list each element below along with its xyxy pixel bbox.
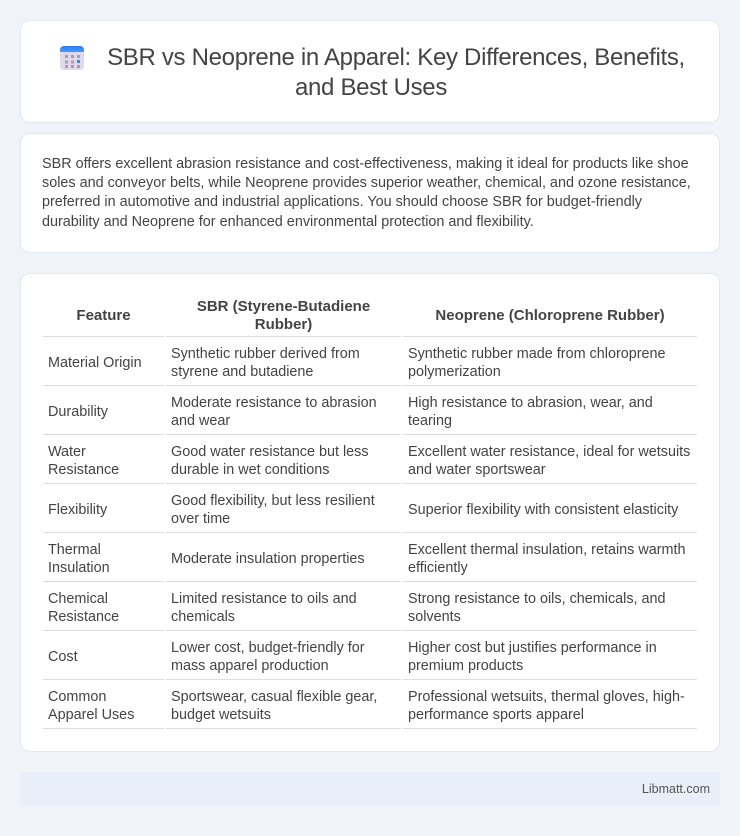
row: thermal insulation (48, 542, 686, 576)
row: chemical resistance: chemicals (171, 609, 235, 625)
row: durability: Durability (48, 404, 108, 420)
intro card (20, 133, 720, 253)
row: water resistance: and water sportswear (408, 462, 546, 478)
row: material origin: Synthetic rubber made from chloroprene (408, 346, 666, 362)
table header: SBR (Styrene-Butadiene (197, 298, 370, 315)
row: thermal insulation: Excellent thermal insulation, retains warmth (408, 542, 686, 558)
row: flexibility: Good flexibility, but less resilient (171, 493, 375, 509)
row: water resistance: Good water resistance but less (171, 444, 369, 460)
row: cost: Lower cost, budget-friendly for (171, 640, 365, 656)
row: cost: Cost (48, 649, 78, 665)
row: chemical resistance: solvents (408, 609, 461, 625)
footer bar (20, 772, 720, 806)
row: thermal insulation: Insulation (48, 560, 110, 576)
row: durability (48, 395, 653, 429)
row: water resistance: Resistance (48, 462, 119, 478)
title: SBR vs Neoprene in Apparel: Key Differences, Benefits, (107, 44, 685, 71)
row: material origin (48, 346, 666, 380)
title (107, 44, 685, 101)
row: water resistance: Excellent water resistance, ideal for wetsuits (408, 444, 690, 460)
row: material origin: Material Origin (48, 355, 142, 371)
intro text: soles and conveyor belts, while Neoprene provides superior weather, chemical, and ozone resistance, (42, 175, 691, 191)
row: chemical resistance: Chemical (48, 591, 108, 607)
row: flexibility: over time (171, 511, 230, 527)
intro text: preferred in automotive and industrial applications. You should choose SBR for budget-friendly (42, 194, 642, 210)
header card (20, 20, 720, 123)
row: thermal insulation: efficiently (408, 560, 468, 576)
row: material origin: polymerization (408, 364, 501, 380)
table header (76, 298, 665, 333)
row: chemical resistance: Strong resistance to oils, chemicals, and (408, 591, 666, 607)
row: chemical resistance: Limited resistance to oils and (171, 591, 357, 607)
row: thermal insulation: Thermal (48, 542, 101, 558)
row: material origin: styrene and butadiene (171, 364, 313, 380)
intro text (42, 156, 691, 230)
row: durability: Moderate resistance to abrasion (171, 395, 377, 411)
row: cost: Higher cost but justifies performance in (408, 640, 657, 656)
icon: calendar (60, 46, 84, 70)
row: common apparel uses: budget wetsuits (171, 707, 271, 723)
row: durability: tearing (408, 413, 452, 429)
title: and Best Uses (295, 74, 447, 101)
table header: Neoprene (Chloroprene Rubber) (435, 307, 665, 324)
table card (20, 273, 720, 752)
row: common apparel uses: Sportswear, casual flexible gear, (171, 689, 377, 705)
row: water resistance: durable in wet conditions (171, 462, 329, 478)
footer text: Libmatt.com (642, 782, 710, 796)
row: flexibility: Flexibility (48, 502, 107, 518)
row: thermal insulation: Moderate insulation properties (171, 551, 365, 567)
intro text: SBR offers excellent abrasion resistance and cost-effectiveness, making it ideal for products like shoe (42, 156, 689, 172)
row: chemical resistance: Resistance (48, 609, 119, 625)
row: flexibility (48, 493, 678, 527)
row: common apparel uses: performance sports apparel (408, 707, 584, 723)
intro text: durability and Neoprene for enhanced environmental protection and flexibility. (42, 214, 534, 230)
row: cost: mass apparel production (171, 658, 329, 674)
table header: Feature (76, 307, 131, 324)
row: flexibility: Superior flexibility with consistent elasticity (408, 502, 678, 518)
row: durability: High resistance to abrasion, wear, and (408, 395, 653, 411)
row: common apparel uses: Professional wetsuits, thermal gloves, high- (408, 689, 685, 705)
row: cost (48, 640, 657, 674)
row: water resistance (48, 444, 690, 478)
row: chemical resistance (48, 591, 666, 625)
row: water resistance: Water (48, 444, 86, 460)
table header: Rubber) (255, 316, 312, 333)
row: cost: premium products (408, 658, 523, 674)
row: material origin: Synthetic rubber derived from (171, 346, 360, 362)
row: common apparel uses: Common (48, 689, 106, 705)
row: common apparel uses: Apparel Uses (48, 707, 134, 723)
row: common apparel uses (48, 689, 685, 723)
row: durability: and wear (171, 413, 230, 429)
